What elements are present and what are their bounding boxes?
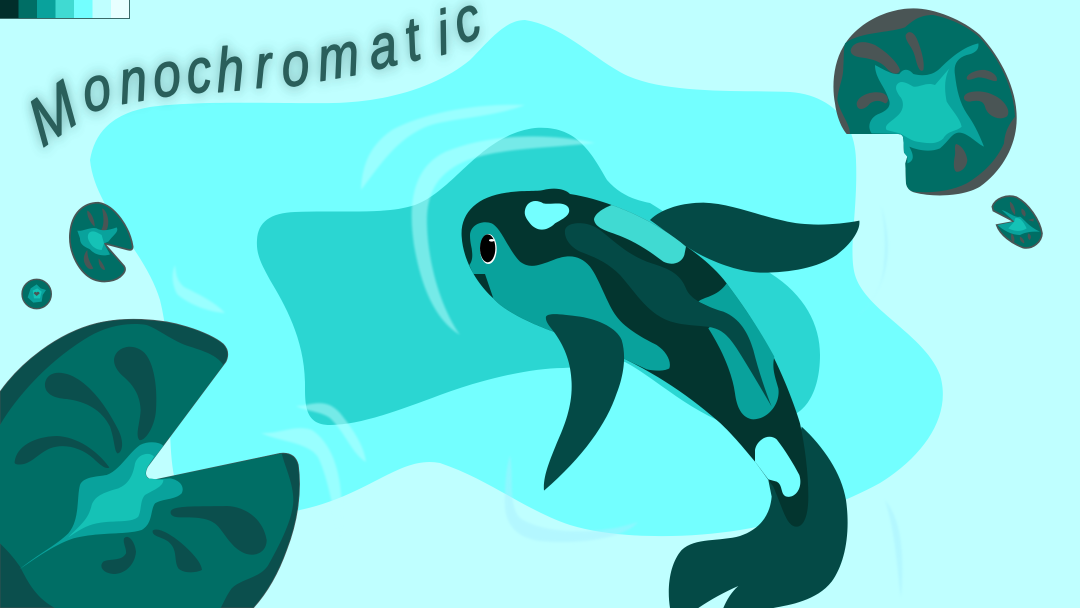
colour palette swatches xyxy=(0,0,130,18)
eye xyxy=(480,234,497,264)
pectoral fin xyxy=(544,314,624,491)
title: M xyxy=(18,67,88,161)
koi fish xyxy=(462,189,859,608)
pad surface xyxy=(0,324,293,608)
pad centre highlight xyxy=(68,454,163,537)
deep water blob xyxy=(257,128,820,425)
lower ripples xyxy=(505,205,902,598)
pad rim xyxy=(833,8,1017,195)
light back band xyxy=(594,205,686,264)
belly xyxy=(469,222,670,371)
title: M xyxy=(18,67,88,161)
pad veins xyxy=(851,32,1008,172)
tail fin xyxy=(669,427,848,608)
small lily pad: right xyxy=(992,196,1042,248)
title xyxy=(18,0,488,161)
dark back patch xyxy=(565,223,772,407)
lily pad: large bottom left xyxy=(0,203,300,608)
lily pad: top right xyxy=(833,8,1042,248)
small lily pad: left xyxy=(70,203,133,281)
pad centre highlight xyxy=(886,68,962,143)
pad centre xyxy=(869,43,984,163)
head spot xyxy=(525,201,569,230)
light water blob xyxy=(90,20,943,536)
pad rim xyxy=(0,319,300,608)
pad centre xyxy=(19,442,183,569)
tiny lily pad xyxy=(22,279,51,309)
back marking xyxy=(698,283,779,419)
tail spot xyxy=(755,437,800,497)
water ripples xyxy=(173,105,595,535)
pad surface xyxy=(837,15,1015,192)
dorsal fin xyxy=(650,203,859,273)
body xyxy=(462,189,808,527)
pad veins xyxy=(15,347,267,574)
